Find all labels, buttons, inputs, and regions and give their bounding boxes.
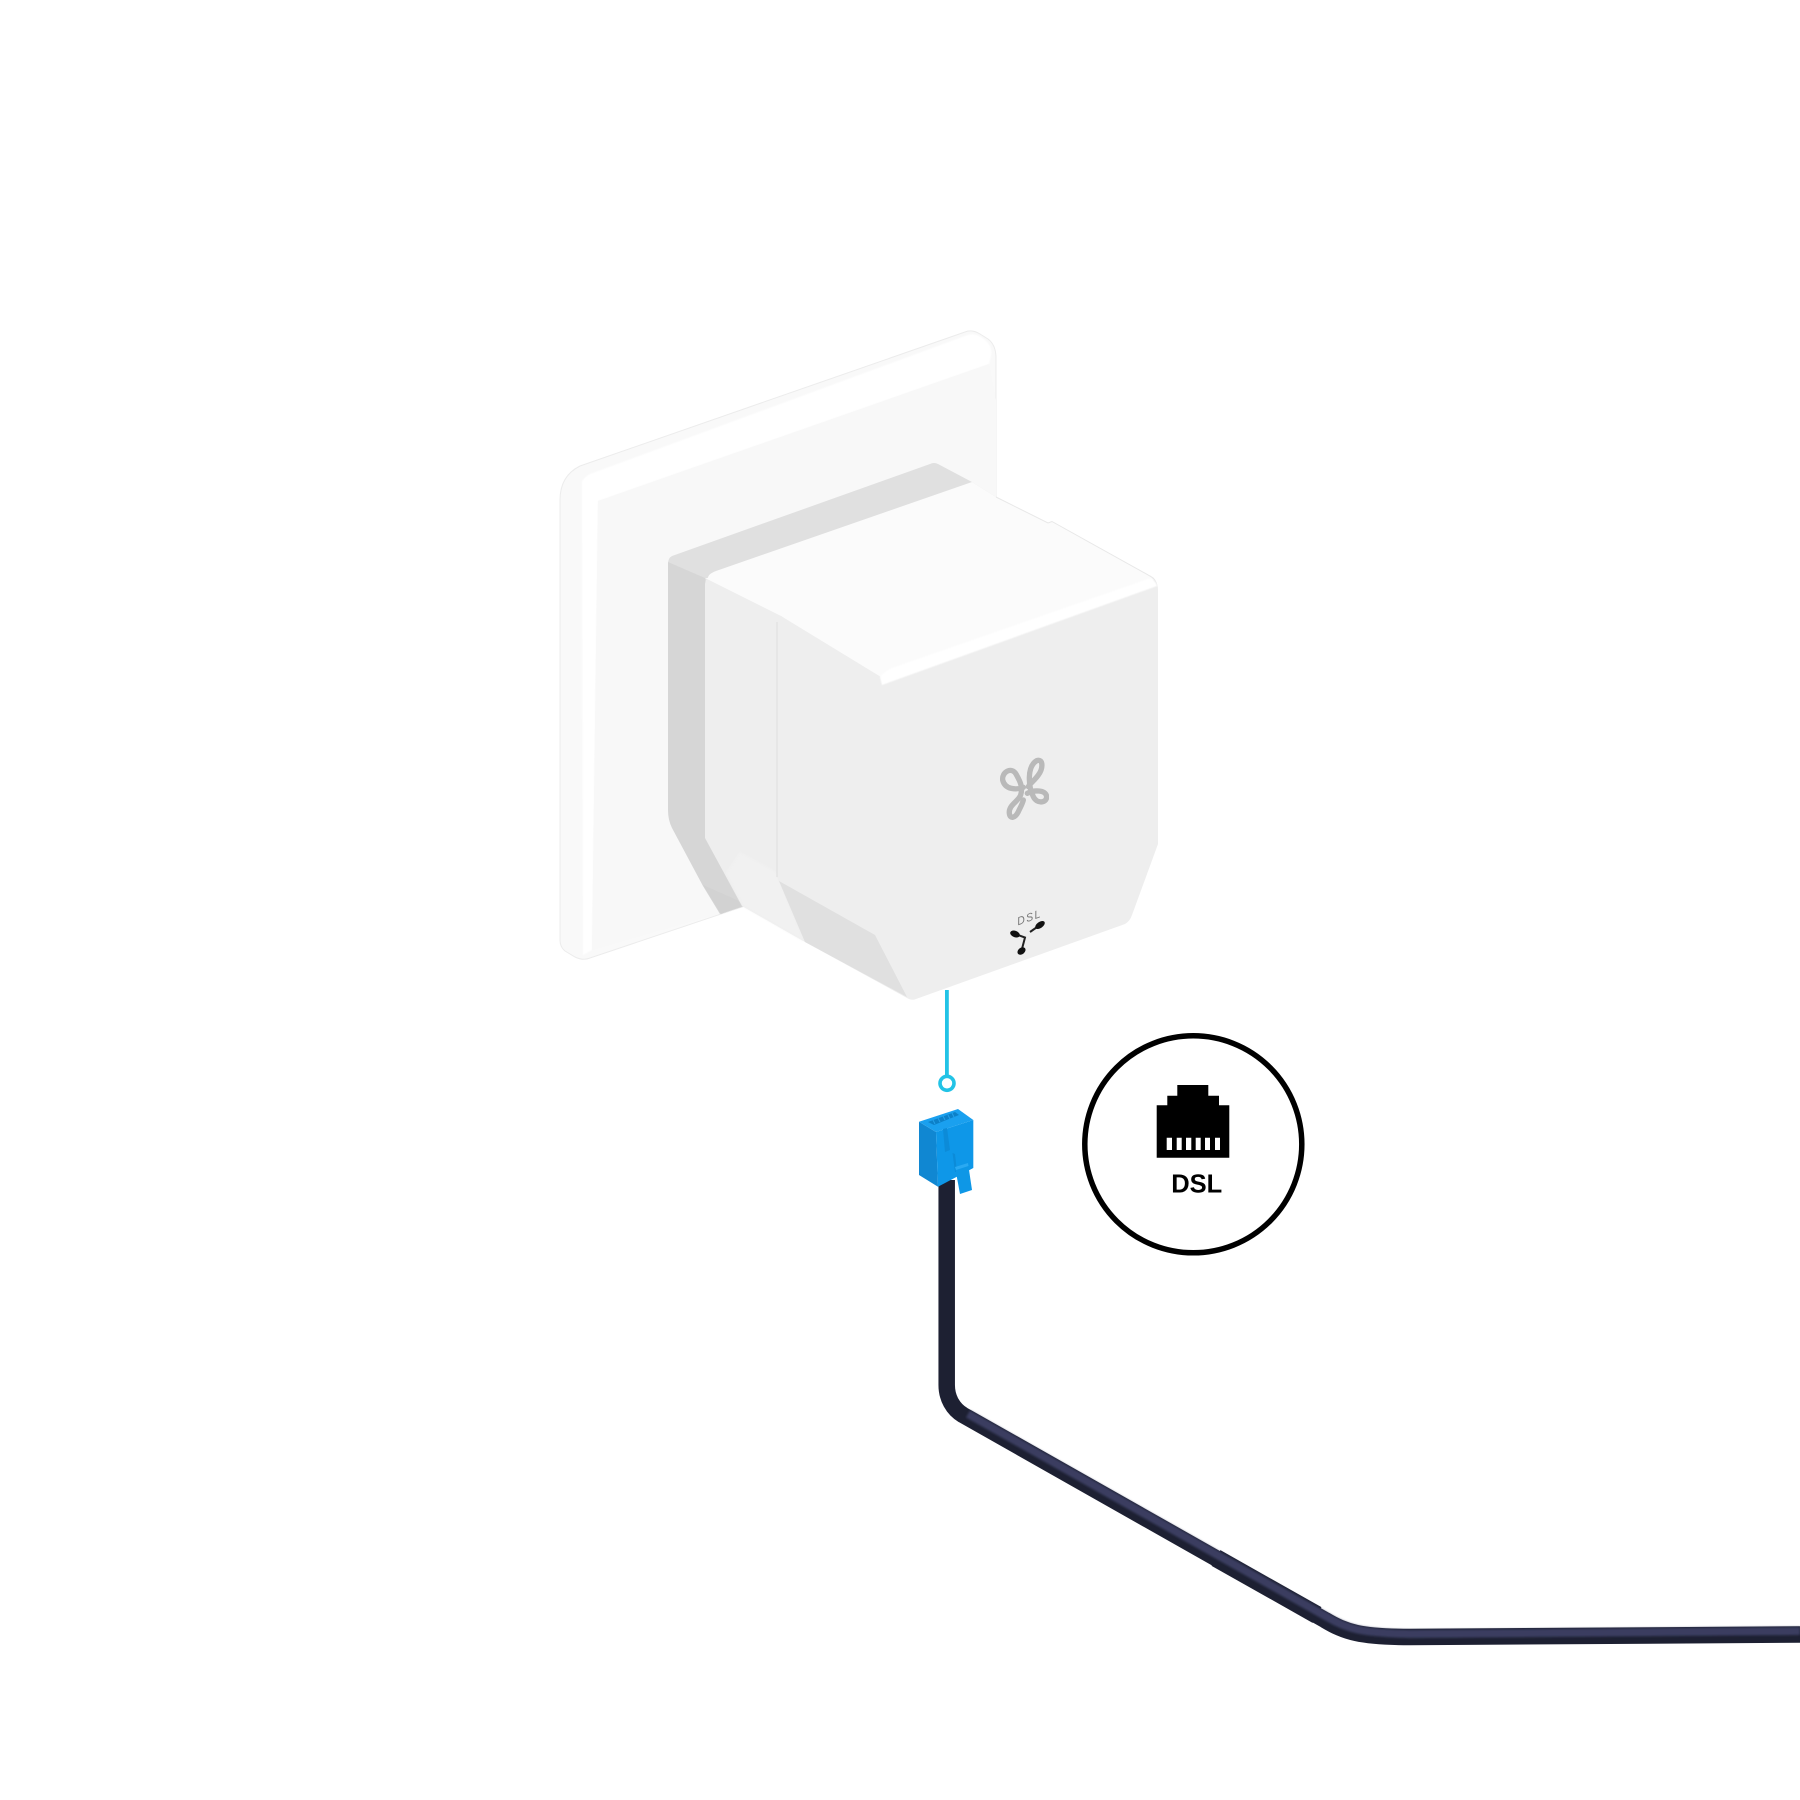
cable xyxy=(947,1180,1800,1637)
icon: router logo xyxy=(1003,760,1047,817)
icon: DSL port marking xyxy=(1009,908,1046,956)
router top face xyxy=(705,482,1157,686)
back housing block xyxy=(668,463,996,914)
middle housing block xyxy=(705,574,805,942)
DSL badge xyxy=(1085,1036,1302,1253)
port label: DSL xyxy=(1016,908,1043,928)
callout line with ring xyxy=(940,990,954,1090)
connector plug xyxy=(919,1109,973,1194)
icon: ethernet port xyxy=(1157,1085,1229,1158)
wall plate xyxy=(560,331,996,959)
router front face xyxy=(777,579,1158,1000)
top edge highlight xyxy=(880,579,1157,685)
badge label: DSL xyxy=(1171,1171,1222,1199)
cable contacts xyxy=(928,1112,959,1125)
